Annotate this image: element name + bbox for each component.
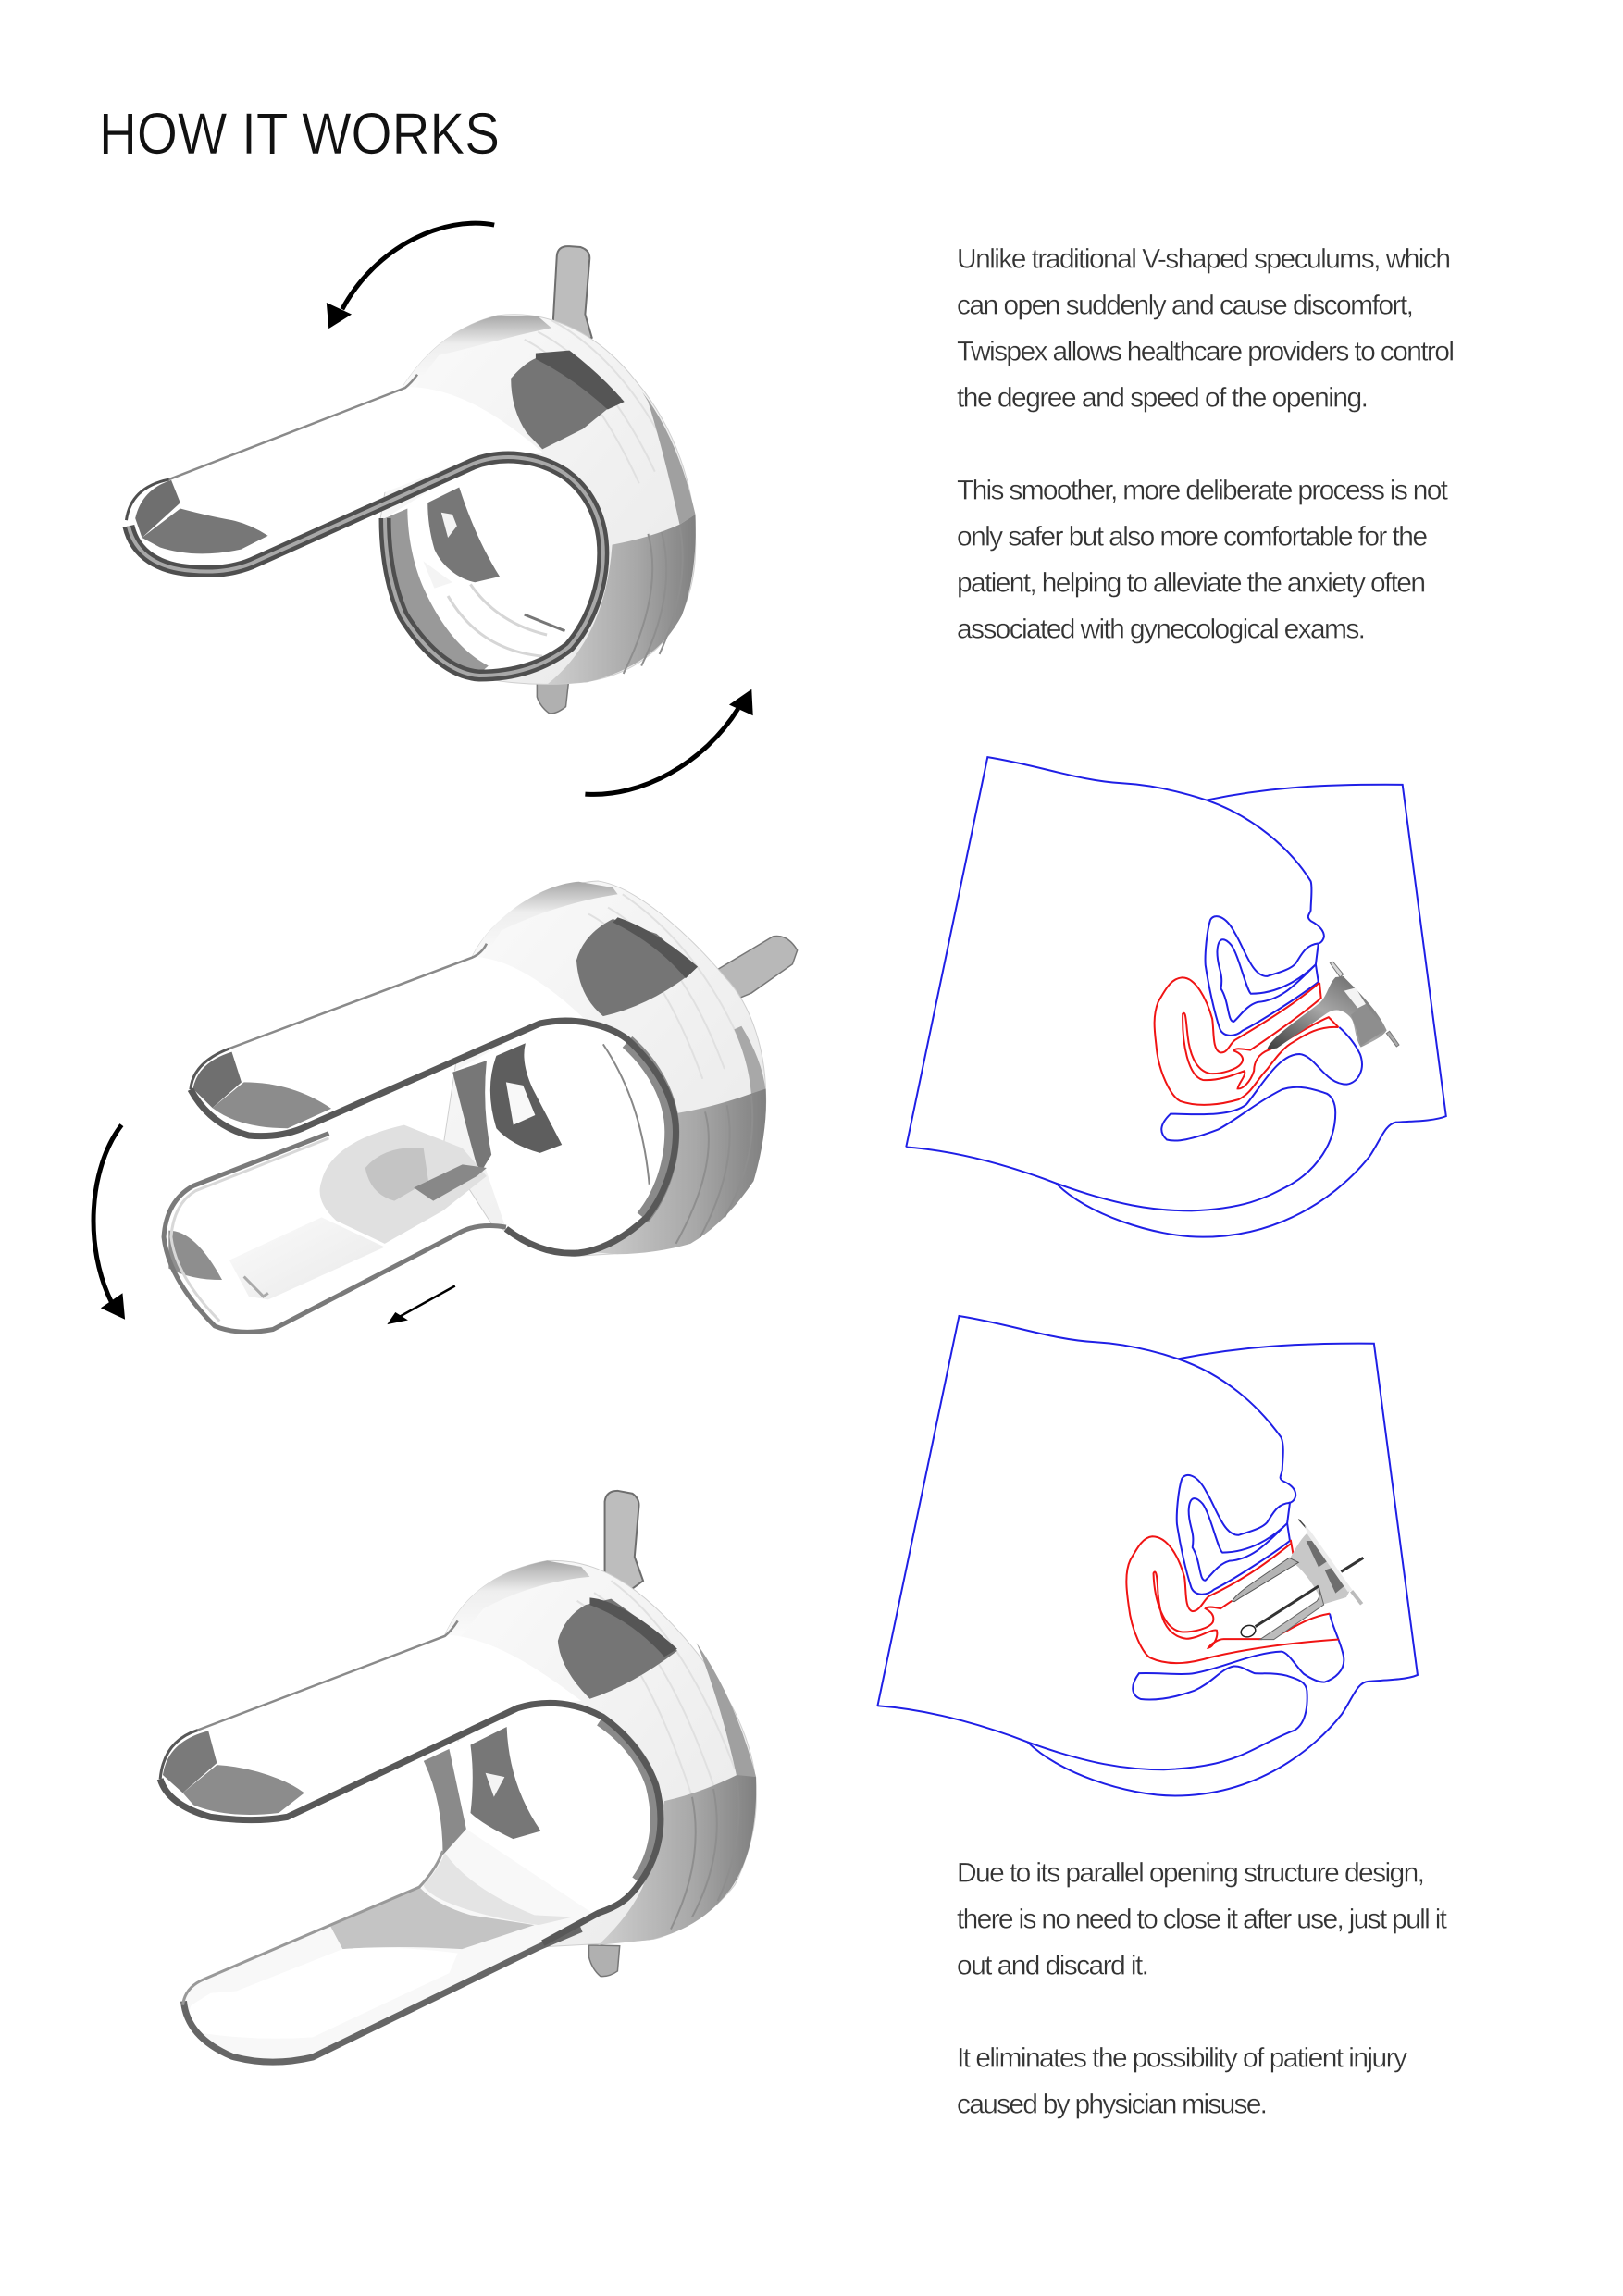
arrow: lower rotation [585,689,753,794]
lens inner band [470,1727,540,1839]
lens highlights [423,513,457,589]
text block: intro paragraph: Twispex allows healthcare providers to control [957,337,1455,366]
tip oval [213,1082,331,1128]
side band lower [547,515,696,685]
inset tab top [1330,962,1344,977]
inset lower blade [1260,1585,1324,1640]
lens inner band [427,487,500,582]
uterus inner [1154,1572,1330,1648]
arm rim [183,1930,581,2062]
text block: intro paragraph [957,244,1455,413]
dark patch [511,355,621,449]
arm neck [424,1853,573,1925]
text block: comfort paragraph: only safer but also more comfortable for the [957,522,1428,552]
lens outer band [385,509,489,677]
top tab [605,1491,643,1595]
lens inner band [490,1043,562,1153]
lens highlight [486,1773,504,1797]
lower blade rim highlight [171,1138,328,1322]
body outline [877,1316,1344,1769]
top tab [553,246,592,347]
text block: injury paragraph: It eliminates the possibility of patient injury [957,2043,1407,2073]
text block: intro paragraph: Unlike traditional V-shaped speculums, which [957,244,1451,274]
inset tab bottom [1386,1031,1399,1047]
dark band [613,917,698,978]
lower blade arm [180,1829,599,2062]
lens outer band [452,1061,491,1174]
rim top [160,1731,198,1779]
flange lines [525,320,673,483]
blade top edge [229,944,487,1049]
bladder inner [1189,1498,1287,1581]
side stripes [676,1096,752,1244]
lower blade rim [164,1134,506,1332]
lens hole [385,457,603,676]
inset tab bottom [1352,1591,1362,1604]
body outline [906,757,1362,1210]
inset side band [1351,1004,1385,1046]
text block: parallel opening paragraph: there is no need to close it after use, just pull it [957,1905,1448,1934]
inset ring flange [1305,1525,1353,1592]
bladder outer [1177,1475,1290,1595]
dark band [536,351,625,409]
tip oval [142,509,268,553]
text block: injury paragraph: caused by physician misuse. [957,2090,1268,2119]
lens hole [424,1703,661,1943]
speculum render: fully open [160,1491,756,2062]
ring body [380,315,696,684]
hood highlight [445,1561,589,1637]
inset ring patches [1307,1541,1344,1594]
lens highlight [506,1082,535,1125]
arm top edge [183,1851,443,2005]
lens edge line [603,1044,650,1185]
arm slot [190,1948,458,2039]
text block: comfort paragraph [957,476,1449,644]
inset speculum open with swab [1233,1520,1363,1640]
inset body [1267,976,1387,1049]
cone shadow [365,1148,428,1201]
bladder inner [1217,939,1316,1022]
inset ring [1289,1533,1351,1604]
uterus inner [1183,983,1338,1088]
swab stick [1256,1558,1363,1627]
uterus outer [1155,977,1338,1105]
flange lines [588,894,749,1079]
anatomy diagram: inserted closed [906,757,1446,1237]
upper blade [219,957,588,1132]
text block: comfort paragraph: associated with gynecological exams. [957,614,1366,644]
upper rim loop [191,1021,676,1253]
dark patch [576,919,687,1016]
inset highlight [1344,987,1366,1008]
inset upper blade [1233,1558,1298,1602]
handle edge [244,1276,268,1297]
swab head [1239,1623,1258,1639]
flange lines [577,1581,735,1797]
text block: intro paragraph: the degree and speed of the opening. [957,383,1369,413]
text block: parallel opening paragraph [957,1858,1448,1980]
side band top [642,392,696,525]
tip dark [163,1731,217,1793]
text block: parallel opening paragraph: Due to its parallel opening structure design, [957,1858,1425,1888]
lens arcs [448,584,547,656]
arm shading [329,1887,535,1949]
anatomy diagram: opened with swab [877,1316,1418,1795]
lens hole [452,1021,676,1253]
bottom tab [537,681,568,714]
ring body [445,1560,756,1947]
side band top [734,1026,766,1094]
tip dark [135,480,180,538]
upper blade [180,1635,581,1813]
title: HOW IT WORKS [99,102,500,167]
arrow: downward rotation [93,1125,125,1320]
arrow: slide direction [387,1285,455,1324]
inset speculum closed [1267,962,1399,1049]
blade [146,387,542,545]
bottom tab [589,1945,620,1977]
rim top [191,1049,229,1089]
ring body [443,881,766,1256]
half moon [168,1231,222,1280]
lens outer band [424,1749,466,1855]
lens mark [525,614,565,631]
speculum render: closed [126,246,696,714]
rim highlight [129,457,603,676]
hood highlight [472,882,618,959]
text block: comfort paragraph: This smoother, more deliberate process is not [957,476,1449,505]
handle [229,1217,385,1299]
dark patch [558,1599,677,1699]
text block: comfort paragraph: patient, helping to alleviate the anxiety often [957,568,1426,598]
cone band [414,1164,487,1201]
side band lower [599,1775,756,1945]
back outline [1028,1344,1418,1795]
side tab [710,937,798,1006]
text block: intro paragraph: can open suddenly and cause discomfort, [957,291,1414,320]
side band lower [588,1088,766,1254]
tip dark [193,1052,242,1108]
dark band [589,1597,677,1657]
text block: parallel opening paragraph: out and discard it. [957,1951,1149,1980]
back outline [1056,785,1446,1237]
side stripes [671,1779,739,1930]
blade top edge [169,375,417,479]
speculum render: opening [164,881,798,1332]
lower blade inner cone [320,1125,487,1244]
text block: injury paragraph [957,2043,1407,2119]
blade top edge [198,1620,458,1731]
uterus outer [1126,1536,1339,1663]
hood highlight [403,316,551,387]
lens side band [627,1042,672,1217]
side band top [697,1643,756,1777]
side stripes [624,526,683,674]
arrow: upper rotation [327,223,494,329]
upper rim loop [160,1703,661,1943]
rim outer loop [129,457,603,676]
inset tab top [1298,1520,1311,1533]
lens side band [601,1720,657,1881]
tip oval [183,1765,304,1815]
bladder outer [1206,916,1319,1036]
rim top [126,479,169,520]
